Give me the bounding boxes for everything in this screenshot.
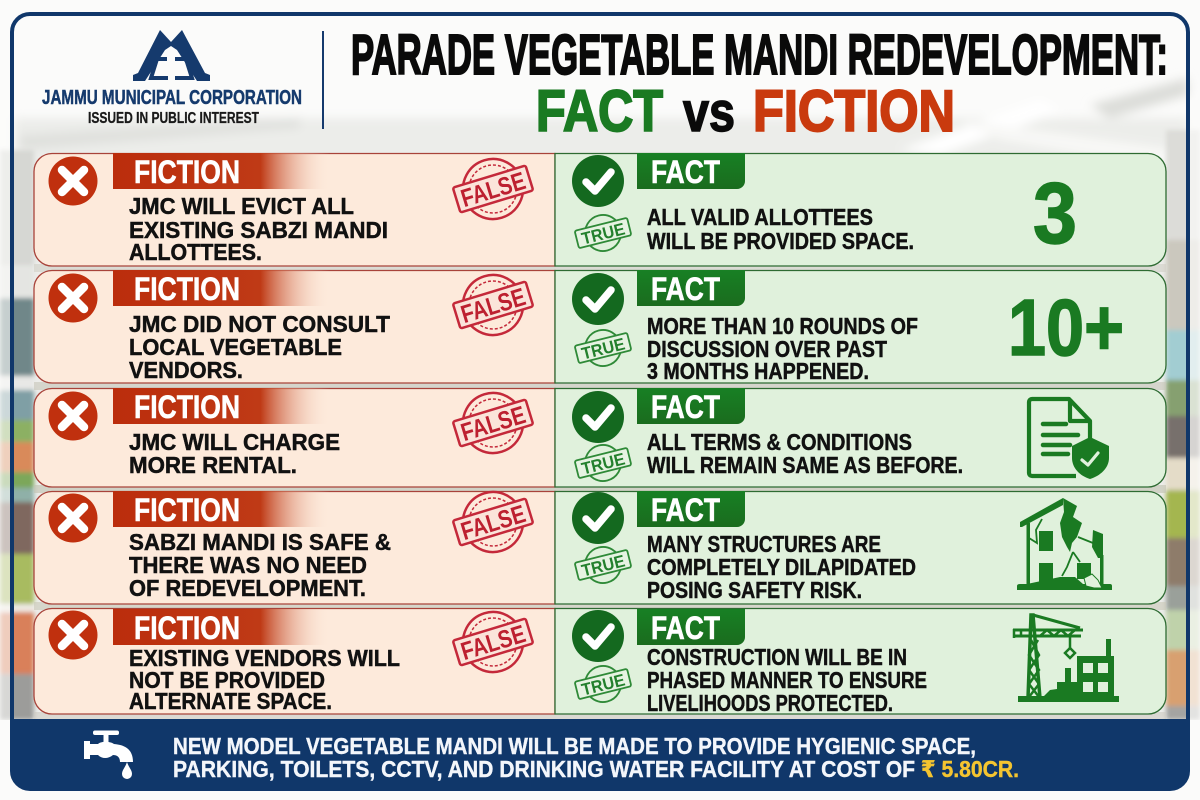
fact tag: FACT <box>651 271 720 307</box>
fiction tag: FICTION <box>134 389 240 425</box>
title <box>351 23 1168 144</box>
stamp: false <box>448 149 538 229</box>
stamp: false <box>448 383 538 463</box>
panel: fact 3 <box>555 388 1166 487</box>
fact text: WILL REMAIN SAME AS BEFORE. <box>647 452 963 478</box>
icon: check <box>572 273 624 325</box>
icon: cross <box>48 392 98 440</box>
stamp: true: TRUE <box>580 219 627 249</box>
fact text: 3 MONTHS HAPPENED. <box>647 358 869 384</box>
stamp: true <box>572 660 634 708</box>
panel: fiction 5 <box>34 602 555 714</box>
fiction tag <box>113 609 330 646</box>
fact text: LIVELIHOODS PROTECTED. <box>647 690 893 716</box>
fiction text: JMC WILL CHARGE <box>129 429 340 455</box>
logo mark <box>133 30 210 81</box>
fiction text: OF REDEVELOPMENT. <box>129 575 366 601</box>
fact text: POSING SAFETY RISK. <box>647 577 862 603</box>
stamp: false <box>448 482 538 562</box>
fact text: DISCUSSION OVER PAST <box>647 336 887 362</box>
stamp: true <box>572 541 634 589</box>
fiction text: SABZI MANDI IS SAFE & <box>129 529 391 555</box>
panel: fact 5 <box>555 608 1166 716</box>
panel: fiction 4 <box>34 482 555 604</box>
fact text: WILL BE PROVIDED SPACE. <box>647 228 914 254</box>
fact tag: FACT <box>651 610 720 646</box>
fiction text: NOT BE PROVIDED <box>129 667 325 693</box>
bottom banner <box>12 719 1188 789</box>
issued note: ISSUED IN PUBLIC INTEREST <box>88 110 259 127</box>
fiction text: EXISTING SABZI MANDI <box>129 217 388 243</box>
fiction text: VENDORS. <box>129 357 243 383</box>
icon: check <box>572 155 624 207</box>
panel: fiction 2 <box>34 265 555 383</box>
number: 3: 3 <box>1033 166 1077 262</box>
icon: cross <box>48 494 98 542</box>
stamp: false <box>448 265 538 345</box>
logo: Jammu Municipal Corporation <box>42 30 302 127</box>
fact tag: FACT <box>651 389 720 425</box>
fiction text: MORE RENTAL. <box>129 452 297 478</box>
fact text: ALL VALID ALLOTTEES <box>647 204 873 230</box>
row 1 <box>34 149 1166 266</box>
banner text: NEW MODEL VEGETABLE MANDI WILL BE MADE TO PROVIDE HYGIENIC SPACE, <box>173 733 976 759</box>
fiction text: LOCAL VEGETABLE <box>129 334 342 360</box>
icon: cross <box>48 156 98 206</box>
fact text <box>647 313 918 384</box>
fiction text: THERE WAS NO NEED <box>129 552 367 578</box>
stamp: false: FALSE <box>458 620 529 666</box>
stamp: true <box>572 209 634 257</box>
fact text <box>647 531 916 603</box>
panel: fact 4 <box>555 491 1166 604</box>
icon: crane and building <box>1013 615 1119 702</box>
banner text <box>173 733 1019 782</box>
stamp: false <box>448 602 538 682</box>
stamp: true <box>572 324 634 372</box>
fiction tag <box>113 270 330 307</box>
fact text <box>647 204 914 254</box>
icon: cross <box>48 274 98 322</box>
fact text: COMPLETELY DILAPIDATED <box>647 554 916 580</box>
stamp: true: TRUE <box>580 551 627 581</box>
title: FICTION <box>753 79 955 144</box>
row 4 <box>34 482 1166 604</box>
icon: water tap <box>84 730 133 779</box>
fiction text <box>129 311 390 383</box>
number: 10+: 10+ <box>1008 283 1124 372</box>
fact text <box>647 644 927 716</box>
fiction text <box>129 529 391 601</box>
stamp: true: TRUE <box>580 334 627 364</box>
stamp: true <box>572 439 634 487</box>
fact tag: FACT <box>651 492 720 528</box>
fiction tag <box>113 491 330 528</box>
organisation name: JAMMU MUNICIPAL CORPORATION <box>42 87 302 109</box>
fiction tag: FICTION <box>134 492 240 528</box>
icon: check <box>572 492 624 544</box>
fiction tag: FICTION <box>134 271 240 307</box>
stamp: true: TRUE <box>580 449 627 479</box>
stamp: false: FALSE <box>458 500 529 546</box>
fiction tag: FICTION <box>134 610 240 646</box>
fiction text: EXISTING VENDORS WILL <box>129 645 400 671</box>
row 5 <box>34 602 1166 716</box>
panel: fiction 1 <box>34 149 555 266</box>
panel: fact 2 <box>555 270 1166 384</box>
fiction text: JMC WILL EVICT ALL <box>129 193 354 219</box>
row 3 <box>34 383 1166 487</box>
fiction tag: FICTION <box>134 154 240 190</box>
stamp: false: FALSE <box>458 283 529 329</box>
fact text: MANY STRUCTURES ARE <box>647 531 881 557</box>
title: FACT <box>536 79 663 144</box>
fact text: MORE THAN 10 ROUNDS OF <box>647 313 918 339</box>
icon: cross <box>48 610 98 660</box>
fact tag: FACT <box>651 154 720 190</box>
icon: check <box>572 610 624 662</box>
stamp: false: FALSE <box>458 167 529 213</box>
title: vs <box>683 80 735 143</box>
fact text: PHASED MANNER TO ENSURE <box>647 667 927 693</box>
fact text: CONSTRUCTION WILL BE IN <box>647 644 907 670</box>
fiction text: ALTERNATE SPACE. <box>129 688 332 714</box>
fiction tag <box>113 388 330 425</box>
fiction text: JMC DID NOT CONSULT <box>129 311 390 337</box>
row 2 <box>34 265 1166 384</box>
fiction tag <box>113 153 330 190</box>
stamp: false: FALSE <box>458 401 529 447</box>
stamp: true: TRUE <box>580 670 627 700</box>
fiction text: ALLOTTEES. <box>129 239 262 265</box>
panel: fiction 3 <box>34 383 555 487</box>
icon: document with shield <box>1029 399 1109 479</box>
panel: fact 1 <box>555 153 1166 266</box>
fiction text <box>129 429 340 478</box>
fiction text <box>129 645 400 714</box>
icon: dilapidated building <box>1017 498 1112 590</box>
fiction text <box>129 193 388 265</box>
icon: check <box>572 391 624 443</box>
header divider <box>322 31 324 129</box>
banner text: PARKING, TOILETS, CCTV, AND DRINKING WATER FACILITY AT COST OF ₹ 5.80CR. <box>173 756 1019 782</box>
fact text: ALL TERMS & CONDITIONS <box>647 429 912 455</box>
fact text <box>647 429 963 478</box>
